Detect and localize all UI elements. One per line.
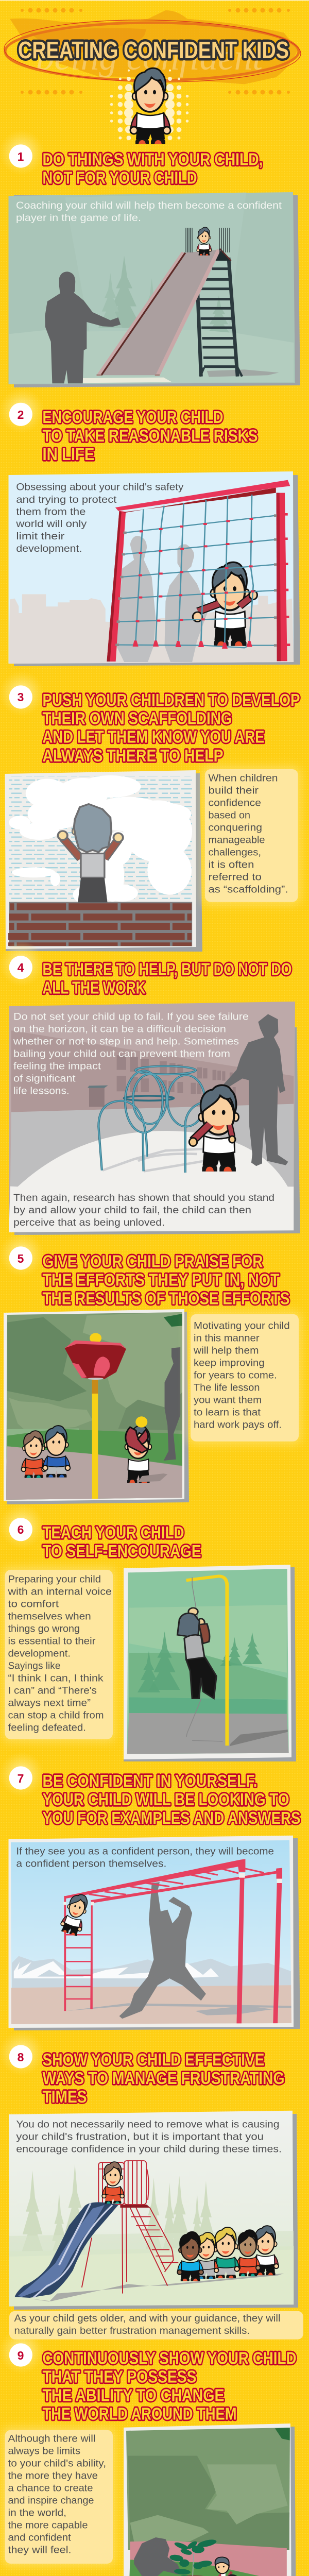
step 3 number: 3 <box>18 690 24 704</box>
step 6 text box: feeling defeated. <box>8 1722 86 1734</box>
step 2 text: and trying to protect <box>16 494 117 505</box>
crawling kid <box>214 2556 237 2576</box>
step 5 text box: in this manner <box>194 1332 260 1344</box>
ground and plaza <box>10 1104 294 1187</box>
step 8 text: encourage confidence in your child during these times. <box>16 2143 282 2155</box>
step 9 text box: to your child's ability, <box>8 2458 106 2469</box>
step 8 caption box: As your child gets older, and with your guidance, they will <box>14 2313 280 2324</box>
step 6 text box: to comfort <box>8 1599 59 1610</box>
step 5 text box: keep improving <box>194 1357 265 1368</box>
step 9 text box: they will feel. <box>8 2544 71 2555</box>
adult silhouette with watering can <box>134 2537 182 2576</box>
step 4 white text: whether or not to step in and help. Sometimes <box>13 1036 239 1047</box>
step 9 number <box>0 2329 44 2374</box>
panel 5: reaching for the target <box>4 1309 189 1504</box>
kid behind the net <box>211 562 249 646</box>
step 6 heading: TEACH YOUR CHILD <box>42 1523 184 1542</box>
step 9 heading: THE ABILITY TO CHANGE <box>42 2385 225 2405</box>
step 5 number: 5 <box>18 1252 24 1265</box>
step 7 heading: BE CONFIDENT IN YOURSELF. <box>42 1771 258 1790</box>
dome shadow <box>102 1149 205 1171</box>
step 1 number <box>0 130 44 175</box>
step 6 heading: TO SELF-ENCOURAGE <box>42 1541 201 1561</box>
distant adult silhouette <box>164 1347 180 1461</box>
step 4 white text: life lessons. <box>13 1085 70 1096</box>
step 1 heading: DO THINGS WITH YOUR CHILD, <box>42 149 263 169</box>
step 6 text box: can stop a child from <box>8 1710 104 1721</box>
step 8 caption box <box>9 2311 303 2340</box>
step 3 text box: confidence <box>208 798 261 809</box>
kid <box>199 1085 239 1172</box>
adult silhouette <box>119 1882 206 2019</box>
step 4 heading <box>42 959 291 997</box>
step 6 text box: “I think I can, I think <box>8 1673 104 1684</box>
step 5 text box: Motivating your child <box>194 1320 290 1331</box>
step 2 heading: IN LIFE <box>42 445 95 464</box>
step 3 text box: as “scaffolding”. <box>208 884 288 895</box>
step 7 number <box>0 1752 44 1797</box>
step 2 text: them from the <box>16 506 85 517</box>
step 2 text: Obsessing about your child's safety <box>16 482 184 493</box>
pine trees <box>19 2164 218 2262</box>
step 8 text: your child's frustration, but it is important that you <box>16 2131 264 2142</box>
mascot halftone burst <box>110 70 188 140</box>
step 2 heading: ENCOURAGE YOUR CHILD <box>42 408 224 427</box>
header dots <box>21 8 290 95</box>
step 4 white text: bailing your child out can prevent them from <box>13 1048 230 1059</box>
step 4 white text: feeling the impact <box>13 1060 101 1072</box>
brick wall <box>8 902 192 946</box>
hanging kid <box>59 1891 92 1937</box>
step 9 number: 9 <box>18 2349 24 2362</box>
step 5 text box: you want them <box>194 1394 262 1405</box>
step 3 text box: When children <box>208 773 278 784</box>
step 4 number: 4 <box>18 961 24 974</box>
step 6 number <box>0 1503 44 1549</box>
step 9 text box <box>2 2427 116 2567</box>
step 3 text box: manageable <box>208 835 265 846</box>
kid seen from behind <box>58 804 123 903</box>
step 8 caption box: naturally gain better frustration management skills. <box>14 2325 250 2336</box>
kid tossing ball <box>125 1416 167 1483</box>
rope net <box>116 495 276 648</box>
step 9 heading: THE WORLD AROUND THEM <box>42 2404 237 2424</box>
panel 8: slide and kids <box>9 2111 298 2310</box>
step 6 text box: with an internal voice <box>7 1586 112 1598</box>
kid on the slide <box>197 227 212 256</box>
step 2 heading: TO TAKE REASONABLE RISKS <box>42 426 258 445</box>
step 8 text: You do not necessarily need to remove what is causing <box>16 2119 279 2130</box>
building <box>11 1030 294 1113</box>
step 6 heading <box>42 1523 201 1561</box>
soil mound <box>186 2575 203 2576</box>
step 3 text box: challenges, <box>208 847 261 858</box>
step 1 text <box>16 200 282 224</box>
step 3 heading: THEIR OWN SCAFFOLDING <box>42 709 232 727</box>
step 6 text box: things go wrong <box>8 1623 80 1635</box>
step 6 number: 6 <box>18 1523 24 1536</box>
target pole <box>92 1379 98 1499</box>
sapling <box>169 2538 217 2576</box>
step 6 text box <box>2 1567 116 1742</box>
step 9 text box: and inspire change <box>8 2495 94 2506</box>
step 5 text box: for years to come. <box>194 1369 277 1381</box>
step 5 text box: to learn is that <box>194 1406 261 1418</box>
panel 9: planting a tree <box>124 2424 296 2576</box>
step 9 text box: a chance to create <box>8 2482 93 2494</box>
parent silhouettes <box>116 536 156 662</box>
step 3 heading <box>42 690 300 765</box>
step 8 number <box>0 2030 44 2076</box>
pine trees <box>149 1632 180 1690</box>
mascot kid <box>130 68 170 144</box>
step 4 number <box>0 941 44 987</box>
step 6 text box: is essential to their <box>8 1636 96 1647</box>
step 6 text box: Sayings like <box>8 1660 61 1672</box>
step 4 white text: of significant <box>13 1073 76 1084</box>
panel 2: climbing net <box>8 471 300 666</box>
step 8 heading: SHOW YOUR CHILD EFFECTIVE <box>42 2050 265 2069</box>
ground <box>11 1985 291 2024</box>
step 4 white text <box>13 1011 249 1096</box>
step 5 heading: GIVE YOUR CHILD PRAISE FOR <box>42 1252 263 1270</box>
step 5 text box <box>187 1311 302 1445</box>
step 7 text <box>16 1845 274 1869</box>
step 4 dark text: Then again, research has shown that should you stand <box>13 1192 274 1204</box>
red slide frame <box>82 2161 178 2294</box>
step 8 heading <box>42 2050 284 2106</box>
step 8 number: 8 <box>18 2050 24 2064</box>
boy in blue <box>43 1426 70 1478</box>
step 5 heading <box>42 1252 289 1308</box>
children watching <box>21 1431 46 1478</box>
step 9 text box: the more they have <box>8 2470 98 2481</box>
step 6 text box: I can” and “There's <box>8 1685 97 1697</box>
panel 7: monkey bars <box>8 1836 300 2030</box>
step 8 heading: TIMES <box>42 2087 87 2106</box>
step 8 text <box>16 2119 282 2155</box>
panel 1: slide <box>8 192 300 387</box>
panel 6: zip line <box>124 1565 296 1761</box>
step 7 heading <box>42 1771 301 1827</box>
step 5 heading: THE EFFORTS THEY PUT IN, NOT <box>42 1270 279 1289</box>
step 3 text box <box>202 766 301 905</box>
step 5 text box: The life lesson <box>194 1382 260 1393</box>
kid on zip line <box>177 1608 216 1699</box>
zip rope <box>186 1578 222 1741</box>
step 1 number: 1 <box>18 150 24 163</box>
blue slide <box>15 2202 118 2298</box>
step 9 text box: always be limits <box>8 2445 80 2456</box>
step 2 text <box>15 482 184 554</box>
step 5 text box: hard work pays off. <box>194 1419 282 1430</box>
step 4 heading: ALL THE WORK <box>42 978 146 997</box>
step 3 text box: build their <box>208 785 259 796</box>
title ghost lettering: being confident <box>36 37 264 78</box>
step 7 text: a confident person themselves. <box>16 1858 166 1869</box>
step 2 number <box>0 388 44 433</box>
city skyline <box>9 594 294 664</box>
step 6 text box: themselves when <box>8 1611 91 1622</box>
monkey bars <box>64 1859 282 2027</box>
step 5 text box: will help them <box>193 1345 259 1356</box>
step 4 white text: Do not set your child up to fail. If you see failure <box>13 1011 249 1022</box>
step 9 text box: and confident <box>8 2532 71 2543</box>
dome climber <box>98 1066 205 1173</box>
step 7 text: If they see you as a confident person, they will become <box>16 1845 274 1857</box>
mountains <box>12 1956 291 1989</box>
panel 3: kid on brick wall <box>5 770 202 952</box>
step 9 text box: Although there will <box>8 2433 96 2444</box>
step 4 dark text <box>13 1192 274 1228</box>
row of kids <box>177 2226 279 2281</box>
step 2 text: development. <box>16 543 82 554</box>
panel 4: playground dome <box>9 1002 300 1235</box>
step 2 text: limit their <box>16 531 65 542</box>
step 2 text: world will only <box>15 518 87 530</box>
ladder and slide <box>97 249 242 377</box>
step 3 text box: based on <box>208 810 250 821</box>
step 6 text box: Preparing your child <box>8 1574 101 1585</box>
step 9 heading <box>42 2348 297 2424</box>
girl on top of slide <box>102 2162 124 2204</box>
step 4 white text: on the horizon, it can be a difficult decision <box>13 1023 226 1035</box>
step 3 number <box>0 671 44 716</box>
step 4 dark text: perceive that as being unloved. <box>13 1217 165 1228</box>
frame posts <box>107 511 126 662</box>
parent silhouette <box>222 1014 288 1166</box>
step 9 text box: in the world, <box>8 2507 66 2518</box>
clouds <box>9 775 192 903</box>
step 3 heading: AND LET THEM KNOW YOU ARE <box>42 727 265 746</box>
step 4 dark text: by and allow your child to fail, the child can then <box>13 1205 251 1216</box>
parent silhouette <box>45 272 121 383</box>
step 9 heading: THAT THEY POSSESS <box>42 2367 197 2386</box>
step 1 heading <box>42 149 263 188</box>
slide scene backdrop <box>9 192 294 384</box>
step 9 text box: the more capable <box>8 2519 88 2531</box>
step 3 heading: ALWAYS THERE TO HELP <box>42 746 224 765</box>
step 1 text: Coaching your child will help them become a confident <box>16 200 282 211</box>
step 3 text box: referred to <box>208 872 262 883</box>
step 5 number <box>0 1232 44 1277</box>
step 1 heading: NOT FOR YOUR CHILD <box>42 168 197 188</box>
step 6 text box: always next time” <box>8 1698 91 1709</box>
step 3 text box: it is often <box>208 859 254 871</box>
step 2 heading <box>42 408 258 464</box>
step 7 number: 7 <box>18 1772 24 1785</box>
title brush blob <box>10 10 298 84</box>
title scribble ellipse <box>4 18 301 84</box>
yellow zip pole <box>186 1576 227 1745</box>
step 2 number: 2 <box>18 408 24 421</box>
step 3 text box: conquering <box>208 822 262 834</box>
step 1 text: player in the game of life. <box>16 212 141 224</box>
railings at slide top <box>186 228 230 252</box>
step 6 text box: development. <box>8 1648 71 1659</box>
